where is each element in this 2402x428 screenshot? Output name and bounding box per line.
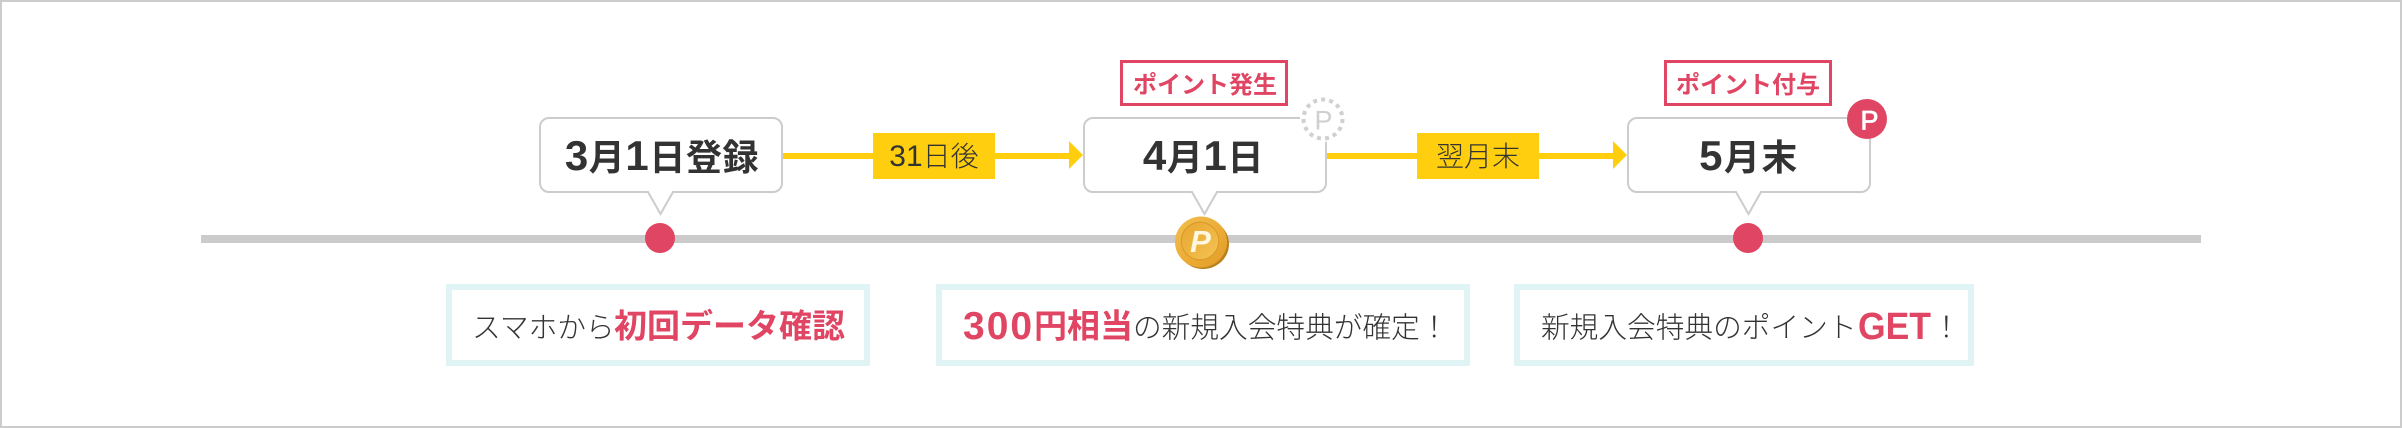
callout: 初回データ確認: 初回データ確認: [614, 308, 845, 344]
timeline bar: [201, 235, 2201, 243]
callout: 初回データ確認: スマホから: [472, 312, 615, 344]
bubble: 3月1日登録: 3月1日登録: [565, 132, 759, 179]
label: 翌月末: [1417, 133, 1539, 179]
callout: 300円相当: 円相当: [1034, 308, 1133, 344]
bubble: 4月1日: 4月1日: [1143, 132, 1264, 179]
label: 31日後: [873, 133, 995, 179]
arrow: 3月1日 to 4月1日: [782, 141, 1083, 169]
arrow: 4月1日 to 5月末: [1326, 141, 1627, 169]
callout: ポイントGET: [1517, 287, 1971, 363]
bubble: 3月1日登録: [540, 118, 782, 214]
icon: dotted pending point: [1300, 96, 1346, 142]
label: 翌月末: 翌月末: [1436, 141, 1520, 172]
icon: dotted pending point: P: [1314, 106, 1333, 136]
bubble: 5月末: 5月末: [1699, 132, 1799, 179]
icon: granted point: P: [1860, 106, 1879, 136]
bubble: 5月末: [1628, 118, 1870, 214]
callout: 初回データ確認: [449, 287, 867, 363]
tag: ポイント付与: [1666, 62, 1830, 104]
marker dot: 3月1日: [645, 223, 675, 253]
tag: ポイント発生: ポイント発生: [1133, 72, 1277, 99]
callout: ポイントGET: 新規入会特典のポイント: [1541, 312, 1857, 344]
callout: ポイントGET: ！: [1932, 312, 1961, 344]
callout: 300円相当: 300: [963, 305, 1034, 348]
tag: ポイント発生: [1122, 62, 1286, 104]
callout: 300円相当: [939, 287, 1467, 363]
tag: ポイント付与: ポイント付与: [1676, 72, 1820, 99]
marker dot: 5月末: [1733, 223, 1763, 253]
icon: granted point: [1847, 99, 1887, 139]
callout: 300円相当: の新規入会特典が確定！: [1133, 312, 1449, 344]
callout: ポイントGET: GET: [1858, 306, 1931, 348]
icon: gold coin: [1175, 216, 1229, 269]
bubble: 4月1日: [1084, 118, 1326, 214]
label: 31日後: 31日後: [889, 140, 979, 173]
icon: gold coin: P: [1190, 224, 1211, 259]
